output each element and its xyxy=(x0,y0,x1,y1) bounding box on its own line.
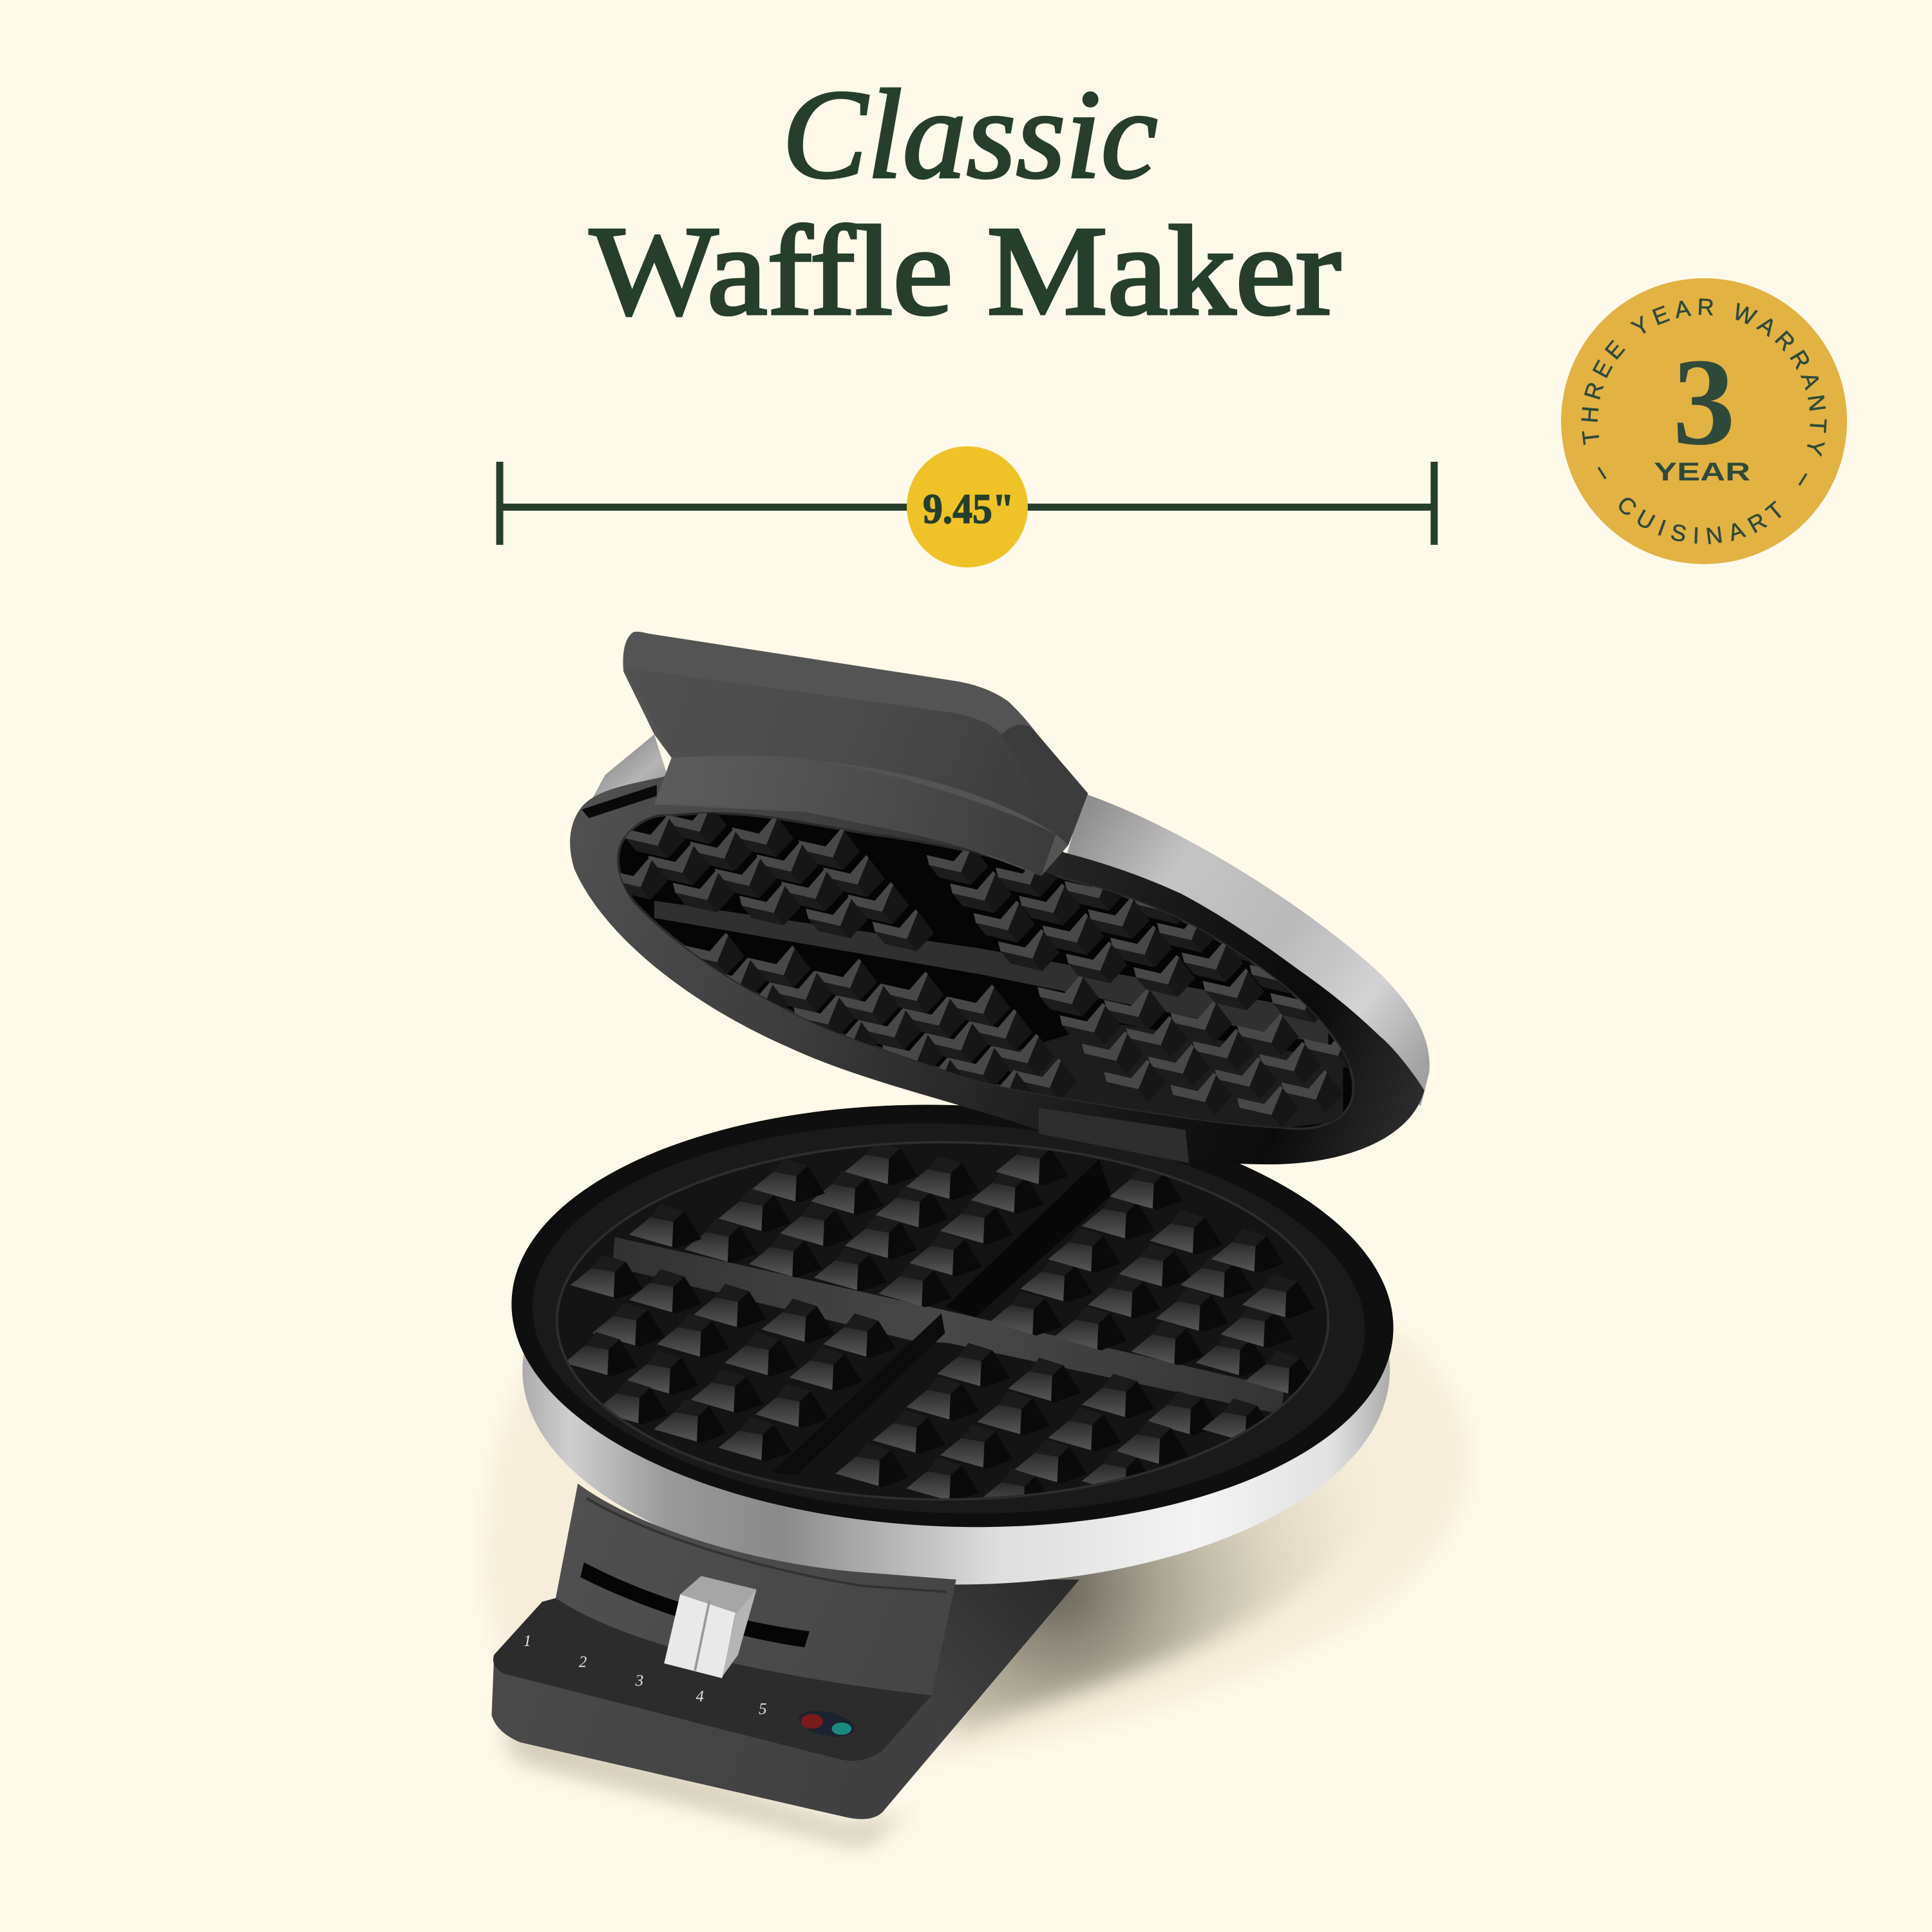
heat numbers: 2 xyxy=(579,1654,587,1671)
warranty badge: CUISINART xyxy=(1619,498,1781,545)
indicator lights xyxy=(797,1707,857,1741)
lower plate xyxy=(504,1090,1401,1542)
heat numbers: 1 xyxy=(524,1633,531,1650)
dimension line: width 9.45 inches xyxy=(500,446,1434,567)
lid cooking surface xyxy=(618,813,1354,1129)
slider knob xyxy=(664,1576,757,1678)
base right side xyxy=(850,1580,1079,1812)
title: Classic xyxy=(782,64,1158,205)
title xyxy=(590,64,1341,341)
lid silver top left xyxy=(588,734,672,807)
infographic canvas xyxy=(486,88,1847,1855)
lower plate silver body xyxy=(522,1156,1390,1584)
outer black rim xyxy=(504,1090,1401,1542)
warranty badge xyxy=(1561,278,1847,564)
cooking surface xyxy=(557,1142,1329,1499)
base front xyxy=(491,1655,939,1819)
heat numbers: 4 xyxy=(696,1688,704,1705)
control panel xyxy=(493,1484,956,1761)
lid xyxy=(570,632,1430,1164)
hinge block xyxy=(1039,1108,1189,1163)
warranty badge: YEAR xyxy=(1654,458,1750,486)
lid rim xyxy=(570,772,1425,1164)
rim lip highlight xyxy=(526,1110,1372,1528)
number deck xyxy=(493,1598,931,1761)
lid black seam xyxy=(582,785,657,818)
warranty badge: – xyxy=(1786,466,1815,491)
product: waffle maker xyxy=(483,632,1470,1848)
warranty badge: – xyxy=(1589,459,1618,484)
waffle grid xyxy=(564,1141,1318,1513)
lid silver band xyxy=(1065,793,1430,1106)
heat numbers: 5 xyxy=(759,1700,767,1718)
dimension line: width 9.45 inches: 9.45" xyxy=(923,486,1014,533)
heat numbers xyxy=(524,1633,767,1718)
warranty badge: THREE YEAR WARRANTY xyxy=(1581,299,1827,457)
lid handle xyxy=(623,632,1088,876)
base xyxy=(491,1580,1079,1819)
heat numbers: 3 xyxy=(635,1672,643,1689)
panel upper face xyxy=(556,1484,956,1696)
temperature slot xyxy=(580,1562,810,1647)
title: Waffle Maker xyxy=(590,200,1341,341)
cast shadow xyxy=(483,1325,1470,1848)
lid waffle grid xyxy=(606,802,1365,1133)
warranty badge: 3 xyxy=(1673,332,1735,471)
